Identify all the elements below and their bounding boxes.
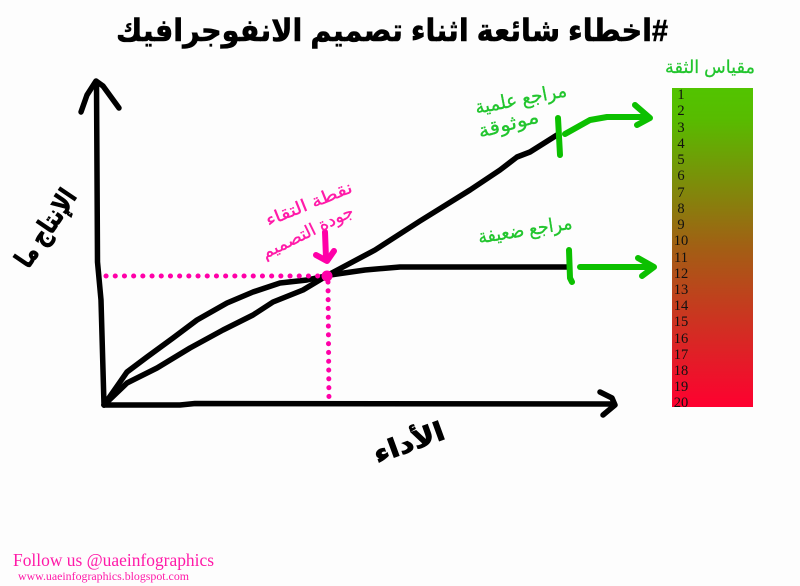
y axis with arrow	[81, 81, 119, 405]
scale numbers: 13	[674, 282, 688, 298]
annotation: intersection point: جودة التصميم	[258, 202, 357, 263]
trust scale heading: مقياس الثقة	[665, 57, 755, 77]
x axis with arrow	[104, 392, 615, 415]
scale numbers: 15	[674, 314, 688, 330]
green marker and arrow: weak references	[569, 250, 654, 282]
pink down arrow	[316, 232, 334, 261]
trust scale	[672, 87, 753, 411]
annotation: intersection point: نقطة التقاء	[263, 178, 355, 230]
footer: website: www.uaeinfographics.blogspot.com	[18, 571, 189, 583]
title: #اخطاء شائعة اثناء تصميم الانفوجرافيك	[116, 13, 668, 49]
scale numbers: 11	[674, 250, 688, 266]
gradient bar	[672, 88, 753, 407]
footer: follow us: Follow us @uaeinfographics	[13, 550, 214, 570]
intersection point	[322, 270, 332, 282]
scale numbers: 16	[674, 331, 688, 347]
scale numbers: 20	[674, 395, 688, 411]
annotation: strong references: موثوقة	[476, 107, 541, 143]
chart: performance curves	[81, 81, 654, 415]
scale numbers: 8	[677, 201, 685, 217]
annotation: intersection point	[258, 178, 357, 263]
scale numbers	[674, 87, 689, 411]
scale numbers: 6	[677, 168, 685, 184]
scale numbers: 9	[677, 217, 685, 233]
scale numbers: 17	[674, 347, 688, 363]
scale numbers: 3	[677, 120, 685, 136]
annotation: strong references	[473, 80, 569, 143]
scale numbers: 5	[677, 152, 685, 168]
vertical dotted guide	[328, 282, 329, 403]
scale numbers: 7	[677, 185, 685, 201]
green marker and arrow: strong references	[558, 105, 650, 155]
x axis label: الأداء	[369, 415, 449, 469]
scale numbers: 14	[674, 298, 689, 314]
scale numbers: 4	[677, 136, 685, 152]
annotation: weak references: مراجع ضعيفة	[477, 213, 574, 248]
scale numbers: 2	[677, 103, 685, 119]
scale numbers: 19	[674, 379, 688, 395]
scale numbers: 1	[677, 87, 685, 103]
annotation: strong references: مراجع علمية	[473, 80, 569, 119]
scale numbers: 10	[674, 233, 688, 249]
scale numbers: 12	[674, 266, 688, 282]
y axis label: الإنتاج ما	[8, 183, 83, 273]
curve: strong references	[104, 135, 557, 405]
curve: weak references	[104, 267, 568, 405]
scale numbers: 18	[674, 363, 688, 379]
horizontal dotted guide	[106, 274, 318, 278]
